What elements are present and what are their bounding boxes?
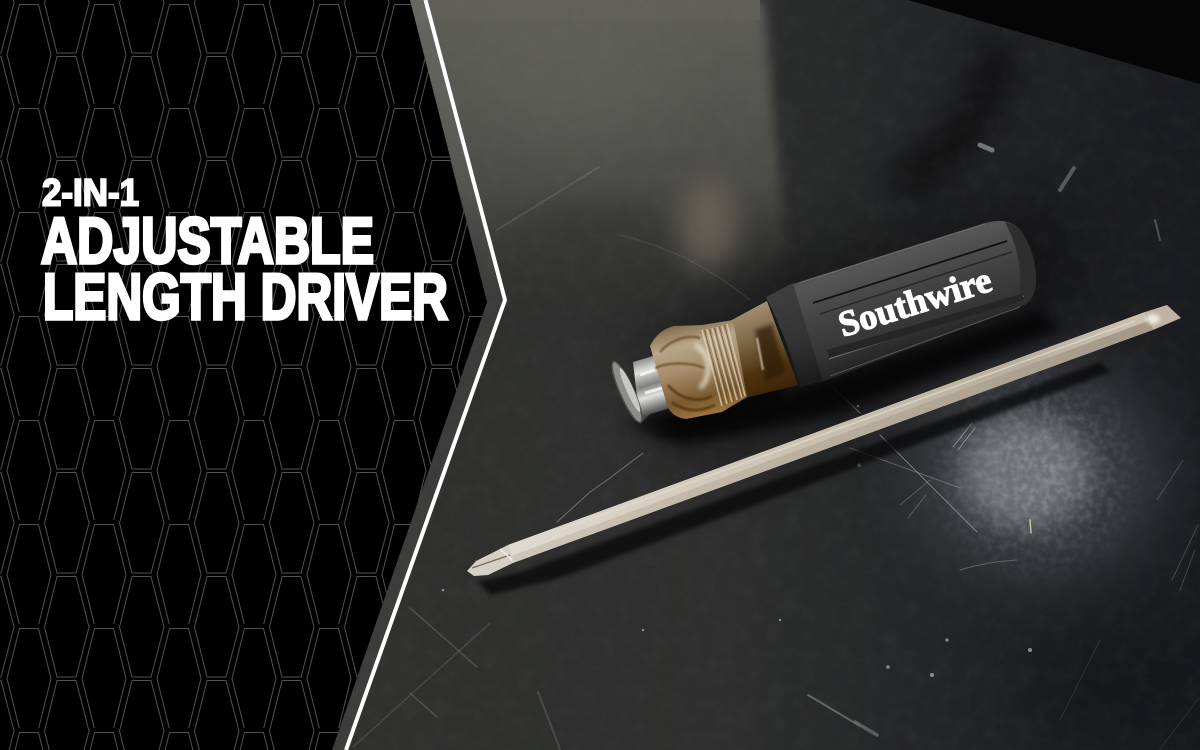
black chevron panel with hexagon pattern [0, 0, 487, 750]
title line: 2-in-1: 2-IN-1 [42, 172, 139, 214]
hexagon line pattern [0, 0, 487, 750]
title line: adjustable: ADJUSTABLE [41, 204, 374, 277]
light reflection band at top of bench [400, 0, 786, 330]
black wedge at top right [908, 0, 1200, 84]
title line: length driver: LENGTH DRIVER [43, 260, 448, 333]
dark diagonal band on bench [880, 30, 1020, 205]
shaft upper facet [508, 312, 1148, 556]
amber knurled nut [650, 320, 747, 419]
grip grooves [799, 224, 1024, 376]
screwdriver handle and ferrule [607, 221, 1036, 425]
grip lower slot [827, 294, 1024, 358]
steel socket [607, 354, 674, 425]
bit shaft with Phillips and slotted tips [467, 305, 1181, 576]
rubber collar [766, 283, 823, 387]
shaft ridge highlight [560, 321, 1135, 530]
screwdriver shadows [478, 310, 1110, 595]
grip end shading [1005, 222, 1036, 308]
Southwire logo: Southwire [833, 259, 996, 345]
Phillips tip [467, 545, 515, 576]
translucent strip beside the chevron [332, 0, 505, 750]
white chevron line [346, 0, 505, 750]
shaft lower facet [508, 312, 1153, 563]
neck inner reflections [755, 324, 786, 382]
specular glare on bench [903, 348, 1180, 590]
surface grain [340, 0, 1200, 750]
slotted tip [1145, 305, 1181, 330]
photo: scratched black workbench [332, 0, 1200, 750]
title [41, 172, 448, 333]
shaded area around handle [650, 190, 1100, 460]
scratches and dust [353, 145, 1199, 749]
amber neck [730, 301, 798, 398]
rubber grip [793, 221, 1036, 386]
